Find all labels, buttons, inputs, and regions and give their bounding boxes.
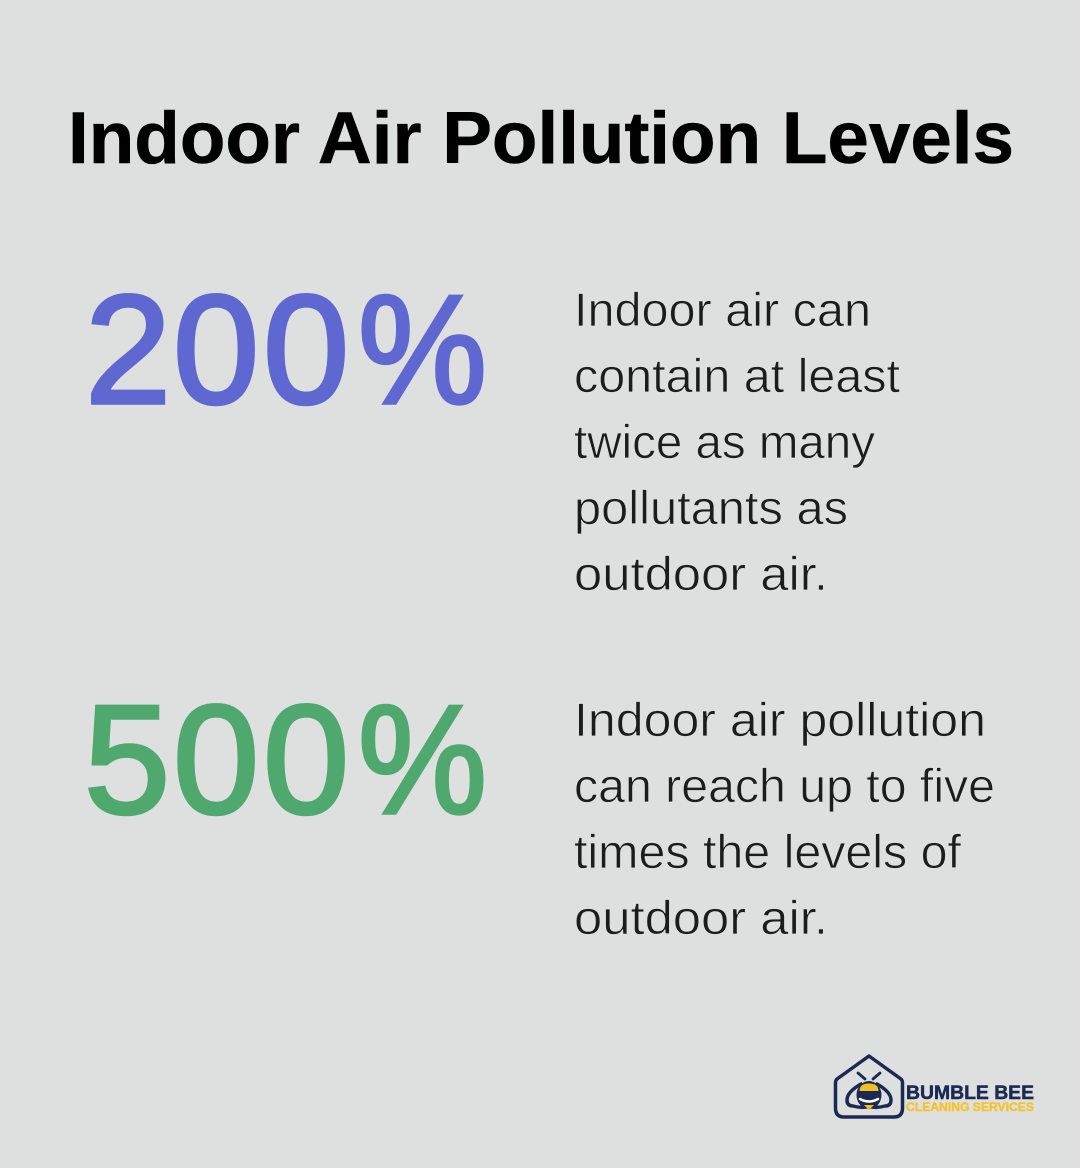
text block: 200% description: outdoor air. (574, 547, 828, 600)
text block: 200% description (574, 283, 900, 600)
logo tagline: CLEANING SERVICES (906, 1102, 1034, 1114)
text block: 500% description: outdoor air. (574, 891, 828, 944)
text block: 500% description: times the levels of (574, 825, 962, 878)
text block: 200% description: pollutants as (574, 481, 848, 534)
text block: 500% description: can reach up to five (574, 759, 995, 812)
logo wordmark: BUMBLE BEE (906, 1082, 1034, 1104)
panel: 200% statistic (85, 263, 900, 600)
text block: 200% description: Indoor air can (574, 283, 871, 336)
logo: Bumble Bee Cleaning Services (836, 1056, 1034, 1117)
stat: 500%: 500 (84, 673, 349, 846)
panel: 500% statistic (84, 673, 995, 944)
text block: 500% description (574, 693, 995, 944)
text block: 500% description: Indoor air pollution (574, 693, 986, 746)
icon: house with bee (836, 1056, 902, 1117)
stat: 500%: % (358, 673, 487, 846)
stat: 200%: 200 (85, 263, 349, 436)
text block: 200% description: contain at least (574, 349, 900, 402)
text block: 200% description: twice as many (574, 415, 875, 468)
title: Indoor Air Pollution Levels (68, 98, 1014, 179)
stat: 200%: % (358, 263, 487, 436)
stat: 500% (84, 673, 487, 846)
stat: 200% (85, 263, 487, 436)
